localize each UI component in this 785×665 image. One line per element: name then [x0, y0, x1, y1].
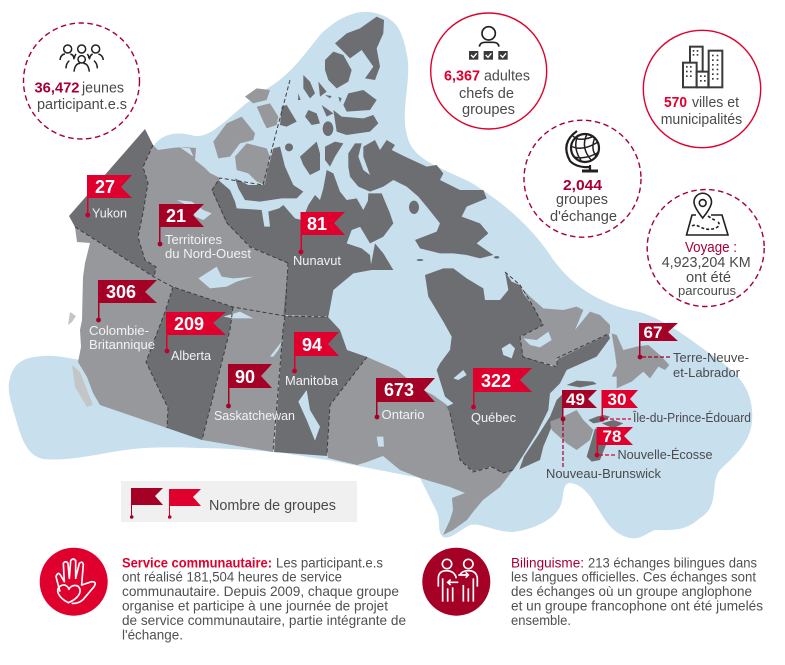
arctic islands, lighter western part	[213, 88, 278, 185]
bilingualism text: 213 échanges bilingues dans	[588, 554, 757, 570]
flag: Manitoba 94: Manitoba	[285, 374, 338, 388]
bilingualism text: Bilinguisme:	[511, 556, 584, 570]
flag: Colombie-Britannique 306: 306	[106, 282, 136, 302]
icon: group of people	[60, 45, 103, 72]
stat circle: adult leaders: 6,367	[444, 69, 480, 85]
flag: Alberta 209: Alberta	[171, 349, 211, 363]
flag: Nouvelle-Ecosse 78	[595, 427, 713, 462]
flag: Yukon 27: 27	[95, 177, 115, 197]
community service text: Service communautaire:	[122, 556, 272, 570]
community service text	[122, 554, 406, 642]
legend	[121, 481, 357, 522]
stat circle: cities: municipalités	[661, 112, 742, 128]
stat circle: exchange groups	[524, 120, 641, 237]
flag: Colombie-Britannique 306: Colombie-	[89, 324, 149, 338]
stat circle: cities	[643, 30, 761, 148]
icon: globe	[566, 131, 599, 171]
eastern provinces	[425, 268, 669, 473]
province: Northwest Territories	[138, 145, 288, 317]
stat circle: travel: Voyage :	[685, 240, 737, 256]
community service text: Les participant.e.s	[276, 554, 383, 570]
Haida Gwaii	[68, 312, 76, 325]
icon: leader with checkboxes	[469, 27, 508, 60]
legend: Nombre de groupes	[209, 498, 336, 514]
flag: Nunavut 81	[293, 212, 345, 268]
Gaspe peninsula	[519, 393, 563, 469]
stat circle: youth participants: jeunes	[81, 80, 124, 96]
stat circle: cities: 570	[664, 95, 687, 111]
stat circle: adult leaders	[431, 13, 547, 129]
stat circle: adult leaders: adultes	[484, 69, 530, 85]
flag: Yukon 27: Yukon	[92, 206, 127, 220]
stat circle: travel	[647, 190, 764, 306]
flag: Colombie-Britannique 306: Britannique	[89, 338, 155, 352]
stat circle: exchange groups: 2,044	[563, 177, 603, 194]
icon: map pin	[686, 193, 728, 235]
flag: Terre-Neuve-et-Labrador 67: 67	[644, 323, 662, 342]
provincial borders	[75, 80, 608, 473]
flag: Terre-Neuve-et-Labrador 67: et-Labrador	[673, 366, 740, 380]
flag: Yukon 27	[85, 175, 132, 220]
Nova Scotia	[587, 428, 607, 462]
province: Newfoundland	[612, 333, 669, 388]
flag: Nunavut 81: Nunavut	[293, 254, 342, 268]
bilingualism text: des échanges où un groupe anglophone	[511, 583, 752, 599]
stat circle: cities: villes et	[692, 95, 739, 111]
province: Yukon	[69, 129, 156, 277]
lakes and rivers	[163, 142, 384, 447]
province: Manitoba	[274, 316, 367, 456]
icon: city buildings	[683, 47, 722, 87]
flag: Nouvelle-Ecosse 78: Nouvelle-Écosse	[618, 447, 713, 462]
province: New Brunswick	[550, 410, 593, 450]
stat circle: adult leaders: groupes	[462, 102, 515, 118]
flag: Colombie-Britannique 306	[89, 280, 157, 352]
flag: Saskatchewan 90: 90	[235, 367, 255, 387]
flag: Territoires du Nord-Ouest 21: Territoires	[165, 233, 222, 247]
community service text: ont réalisé 181,504 heures de service	[122, 569, 342, 585]
bilingualism text: les langues officielles. Ces échanges sont	[511, 569, 756, 585]
stat circle: adult leaders: chefs de	[459, 86, 514, 102]
flag: Saskatchewan 90: Saskatchewan	[214, 409, 295, 423]
flag: Manitoba 94	[285, 332, 339, 388]
flag: Ontario 673: Ontario	[382, 408, 425, 422]
Quebec and Labrador lakes	[430, 332, 552, 380]
flag: Terre-Neuve-et-Labrador 67	[638, 323, 749, 380]
flag: Ile-du-Prince-Edouard 30: 30	[608, 390, 626, 409]
province: Nunavut mainland	[212, 147, 372, 317]
stat circle: youth participants	[24, 23, 140, 139]
flag: Saskatchewan 90	[214, 364, 295, 423]
province: British Columbia	[75, 227, 173, 428]
flag: Ile-du-Prince-Edouard 30: Île-du-Prince-Édouard	[632, 410, 751, 425]
bilingualism text: ensemble.	[511, 612, 571, 628]
community service text: de service communautaire, partie intégrante de	[122, 612, 406, 628]
province: Ontario	[327, 357, 513, 535]
stat circle: travel: ont été	[686, 270, 731, 286]
Anticosti Island	[567, 381, 597, 387]
community service icon	[40, 548, 108, 616]
bilingualism icon	[422, 548, 490, 616]
flag: Quebec 322	[471, 368, 532, 425]
flag: Ile-du-Prince-Edouard 30	[600, 390, 751, 425]
flag: Ontario 673: 673	[384, 380, 414, 400]
stat circle: youth participants: participant.e.s	[37, 97, 127, 113]
Vancouver Island	[72, 365, 93, 407]
flag: Nouveau-Brunswick 49: Nouveau-Brunswick	[546, 467, 662, 481]
province: Quebec	[425, 268, 610, 473]
stat circle: travel: parcourus	[678, 283, 736, 298]
flag: Territoires du Nord-Ouest 21	[158, 204, 252, 261]
flag: Ontario 673	[375, 378, 435, 422]
flag: Nunavut 81: 81	[307, 214, 327, 234]
province: Saskatchewan	[202, 307, 285, 452]
flag: Alberta 209: 209	[174, 314, 204, 334]
flag: Alberta 209	[165, 312, 226, 363]
flag: Nouvelle-Ecosse 78: 78	[603, 427, 621, 446]
map of Canada	[9, 12, 752, 538]
province: Alberta	[146, 287, 233, 440]
stat circle: exchange groups: d'échange	[550, 209, 617, 225]
flag: Quebec 322: 322	[481, 371, 511, 391]
community service text: organise et participe à une journée de projet	[122, 598, 388, 614]
province: Labrador	[520, 287, 610, 367]
flag: Nouveau-Brunswick 49: 49	[566, 390, 585, 409]
bilingualism text	[511, 554, 763, 628]
stat circle: youth participants: 36,472	[34, 80, 80, 96]
Prince Edward Island	[588, 415, 610, 423]
flag: Nouveau-Brunswick 49	[546, 390, 662, 481]
community service text: communautaire. Depuis 2009, chaque groupe	[122, 583, 399, 599]
stat circle: exchange groups: groupes	[556, 192, 608, 208]
bilingualism text: et un groupe francophone ont été jumelés	[511, 598, 763, 614]
stat circle: travel: 4,923,204 KM	[662, 255, 751, 271]
flag: Territoires du Nord-Ouest 21: du Nord-Ouest	[165, 247, 252, 261]
flag: Terre-Neuve-et-Labrador 67: Terre-Neuve-	[673, 351, 749, 365]
flag: Manitoba 94: 94	[302, 335, 322, 355]
water background	[9, 12, 752, 538]
community service text: l'échange.	[122, 626, 183, 642]
flag: Quebec 322: Québec	[471, 411, 516, 425]
Cape Breton	[602, 420, 623, 428]
flag: Territoires du Nord-Ouest 21: 21	[166, 206, 186, 226]
arctic islands	[280, 17, 499, 270]
